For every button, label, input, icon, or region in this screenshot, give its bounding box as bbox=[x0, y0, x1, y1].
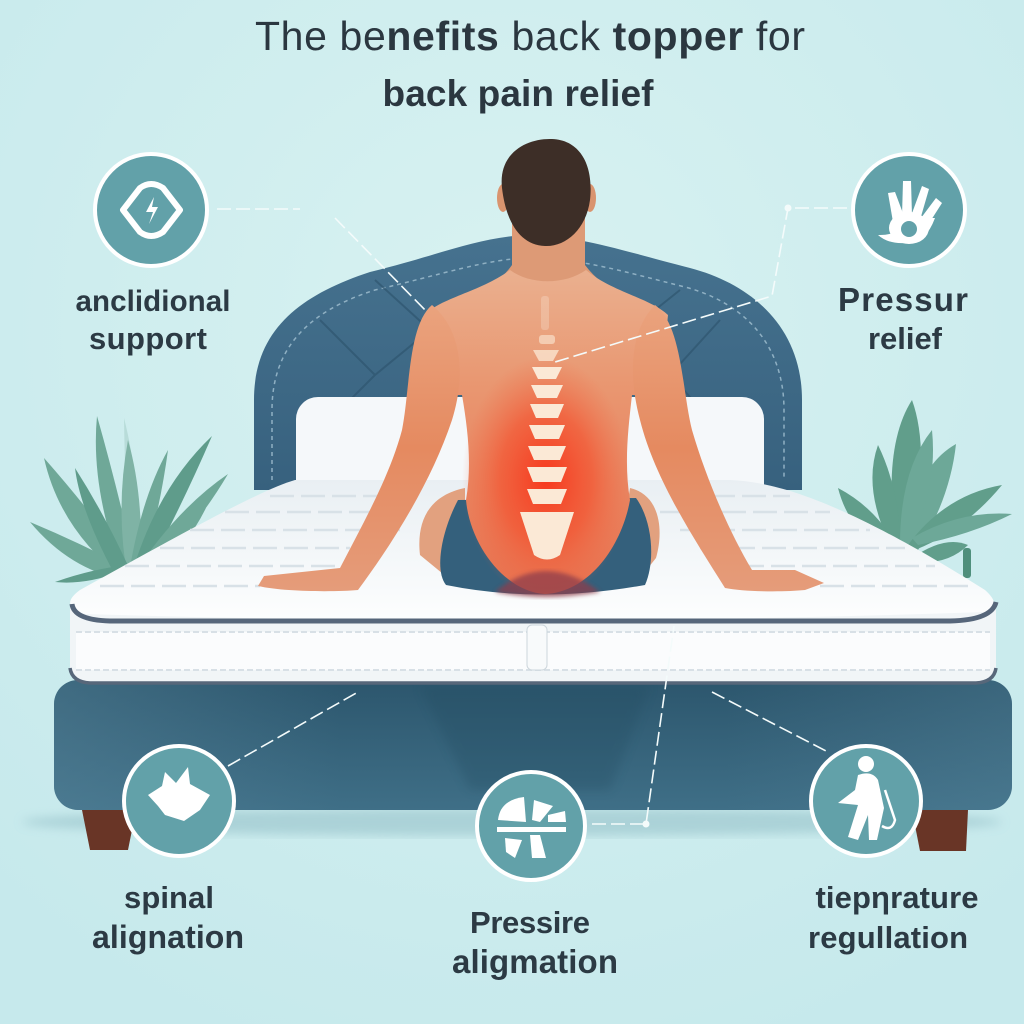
label: bottom right: regullation bbox=[808, 920, 968, 955]
person bbox=[258, 139, 824, 600]
icon: top right hand badge bbox=[853, 154, 965, 266]
label: bottom left: alignation bbox=[92, 919, 244, 955]
icon: bottom center badge bbox=[477, 772, 585, 880]
plant: right bbox=[838, 400, 1012, 578]
label: top right: relief bbox=[868, 321, 943, 356]
label: top left: anclidional bbox=[76, 285, 230, 318]
label: top right: Pressur bbox=[838, 281, 968, 318]
label: bottom right bbox=[808, 880, 978, 955]
head: hair and neck bbox=[470, 139, 625, 296]
label: bottom right: tiepηrature bbox=[816, 880, 978, 915]
mattress top bbox=[70, 480, 996, 621]
label: top left: support bbox=[89, 321, 207, 356]
pain glow bbox=[462, 356, 630, 600]
title bbox=[255, 13, 805, 114]
title: The benefits back topper for bbox=[255, 13, 805, 59]
plant: left bbox=[30, 416, 228, 585]
thighs bbox=[419, 488, 465, 578]
label: bottom center: Pressire bbox=[470, 905, 590, 940]
bed base bbox=[22, 680, 1012, 851]
shorts bbox=[440, 498, 651, 594]
icon: bottom left spinal badge bbox=[124, 746, 234, 856]
left arm bbox=[258, 305, 460, 591]
mattress side bbox=[70, 606, 996, 683]
label: bottom center bbox=[452, 905, 618, 980]
title: back pain relief bbox=[382, 73, 654, 114]
connector lines bbox=[217, 208, 847, 824]
connector dots bbox=[642, 204, 792, 828]
label: bottom center: aligmation bbox=[452, 943, 618, 980]
bed headboard bbox=[254, 235, 802, 490]
label: bottom left bbox=[92, 880, 244, 955]
right arm bbox=[633, 305, 824, 591]
icon: bottom right figure badge bbox=[811, 746, 921, 856]
torso bbox=[425, 270, 668, 594]
spine bbox=[520, 296, 574, 560]
label: top left bbox=[76, 285, 230, 356]
icon: top left lightning badge bbox=[95, 154, 207, 266]
label: top right bbox=[838, 281, 968, 356]
pillows bbox=[296, 397, 764, 509]
label: bottom left: spinal bbox=[124, 880, 214, 915]
